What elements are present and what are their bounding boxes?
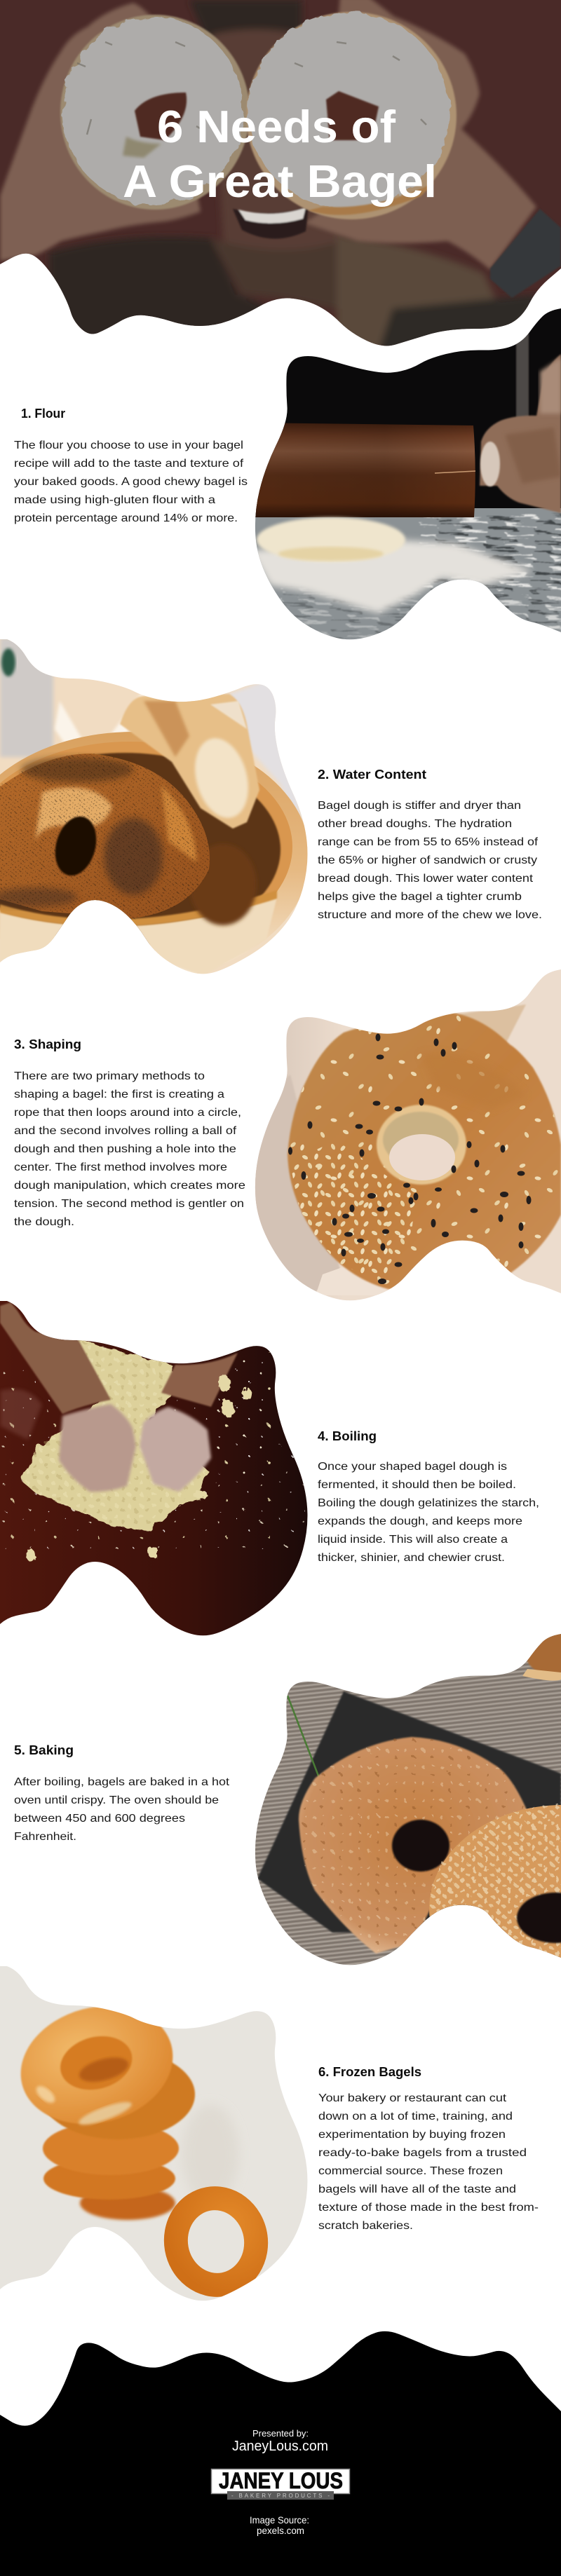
heading: 1. Flour: 1. Flour — [21, 407, 65, 421]
body text: shaping: rope that then loops around into a circle, — [14, 1107, 241, 1119]
heading: 6. Frozen Bagels: 6. Frozen Bagels — [318, 2065, 421, 2079]
image source: Image Source: — [250, 2514, 309, 2526]
body text: baking: between 450 and 600 degrees — [14, 1813, 185, 1825]
presented by: Presented by: — [252, 2428, 309, 2439]
left hand — [0, 3, 201, 261]
image source: pexels.com — [257, 2525, 304, 2536]
body text: flour: The flour you choose to use in your bagel — [14, 439, 243, 451]
body text: frozen bagels: down on a lot of time, training, and — [318, 2111, 513, 2122]
body text: water content — [318, 800, 542, 921]
loose dough crumbs — [27, 1375, 252, 1562]
panel: 3. Shaping — [14, 966, 561, 1309]
dough mass — [22, 1340, 208, 1531]
left arm and hand — [0, 1302, 136, 1492]
body text: baking: Fahrenheit. — [14, 1831, 76, 1843]
photo: toasted bagels on slate — [255, 1634, 561, 1965]
chive — [288, 1696, 319, 1778]
body text: baking — [14, 1776, 230, 1843]
body text: flour: recipe will add to the taste and texture of — [14, 458, 244, 470]
body text: boiling: Boiling the dough gelatinizes the starch, — [318, 1497, 539, 1509]
body text: water content: range can be from 55 to 65% instead of — [318, 836, 539, 848]
rolling pin — [249, 423, 475, 517]
body text: water content: bread dough. This lower water content — [318, 873, 534, 885]
body text: baking: oven until crispy. The oven should be — [14, 1794, 219, 1806]
body text: frozen bagels: bagels will have all of the taste and — [318, 2183, 516, 2195]
photo: rolling pin on dough — [249, 305, 561, 648]
body text: frozen bagels: texture of those made in the best from- — [318, 2202, 539, 2214]
body text: water content: helps give the bagel a tighter crumb — [318, 891, 522, 903]
footer — [0, 2331, 561, 2576]
body text: frozen bagels — [318, 2092, 539, 2232]
poppy seed bagel — [0, 754, 210, 918]
heading: 5. Baking: 5. Baking — [14, 1743, 74, 1757]
hero: woman holding bagels with title — [0, 0, 561, 350]
body text: flour: made using high-gluten flour with a — [14, 494, 215, 506]
body text: frozen bagels: experimentation by buying frozen — [318, 2129, 506, 2141]
bagel body — [280, 1013, 561, 1290]
body text: shaping: dough and then pushing a hole into the — [14, 1143, 236, 1155]
photo: sesame bagel — [249, 966, 561, 1309]
slate board — [257, 1691, 561, 1933]
dough — [257, 517, 405, 562]
footer black wave — [0, 2331, 561, 2576]
bagel stack — [8, 1989, 195, 2220]
body text: frozen bagels: ready-to-bake bagels from a trusted — [318, 2147, 527, 2159]
right arm and hand — [140, 1353, 238, 1492]
logo: Janey Lous bakery products: - BAKERY PRODUCTS - — [231, 2493, 330, 2499]
heading: 3. Shaping: 3. Shaping — [14, 1037, 81, 1051]
body text: shaping: and the second involves rolling a ball of — [14, 1125, 237, 1137]
presented by — [232, 2428, 328, 2454]
body text: shaping — [14, 1070, 245, 1228]
heading: 4. Boiling: 4. Boiling — [318, 1429, 377, 1443]
heading: 2. Water Content: 2. Water Content — [318, 768, 426, 782]
body text: frozen bagels: commercial source. These frozen — [318, 2165, 503, 2177]
presented by: JaneyLous.com — [232, 2439, 328, 2454]
photo: stack of orange bagels — [0, 1961, 312, 2305]
body text: shaping: dough manipulation, which creates more — [14, 1180, 245, 1192]
body text: frozen bagels: Your bakery or restaurant can cut — [318, 2092, 507, 2104]
panel: 1. Flour — [14, 305, 561, 648]
body text: boiling — [318, 1461, 539, 1564]
body text: flour: protein percentage around 14% or more. — [14, 512, 238, 524]
bread piece — [120, 694, 259, 829]
baker hand — [480, 354, 561, 513]
body text: baking: After boiling, bagels are baked in a hot — [14, 1776, 230, 1788]
watch — [490, 209, 561, 298]
body text: water content: structure and more of the chew we love. — [318, 909, 542, 921]
title: A Great Bagel — [123, 156, 437, 207]
panel: 5. Baking — [14, 1634, 561, 1965]
title — [123, 101, 437, 207]
body text: frozen bagels: scratch bakeries. — [318, 2220, 413, 2232]
panel: 2. Water Content — [0, 634, 542, 981]
panel: 4. Boiling — [0, 1296, 539, 1640]
hero photo — [0, 0, 561, 350]
left bagel — [60, 15, 250, 210]
image source — [250, 2514, 309, 2536]
body text: flour: your baked goods. A good chewy bagel is — [14, 476, 248, 488]
body text: water content: the 65% or higher of sandwich or crusty — [318, 854, 537, 866]
sesame bagel — [429, 1805, 561, 2012]
body text: shaping: tension. The second method is gentler on — [14, 1198, 244, 1210]
body text: water content: Bagel dough is stiffer and dryer than — [318, 800, 521, 812]
mouth — [233, 206, 309, 239]
logo: Janey Lous bakery products: JANEY LOUS — [219, 2468, 343, 2493]
right bagel — [246, 12, 457, 219]
black sesame seeds — [288, 1033, 532, 1284]
body text: shaping: shaping a bagel: the first is creating a — [14, 1089, 224, 1100]
body text: shaping: center. The first method involves more — [14, 1161, 227, 1173]
photo: poppy bagel in basket — [0, 634, 312, 981]
body text: boiling: thicker, shinier, and chewier crust. — [318, 1552, 505, 1564]
bagel hole — [377, 1105, 466, 1185]
body text: shaping: the dough. — [14, 1216, 74, 1228]
body text: boiling: Once your shaped bagel dough is — [318, 1461, 507, 1473]
toasted bagel — [299, 1737, 529, 1954]
body text: water content: other bread doughs. The hydration — [318, 818, 512, 830]
panel: 6. Frozen Bagels — [0, 1961, 539, 2305]
photo: hands kneading dough — [0, 1296, 312, 1640]
body text: boiling: expands the dough, and keeps more — [318, 1515, 522, 1527]
body text: boiling: liquid inside. This will also create a — [318, 1534, 508, 1546]
body text: boiling: fermented, it should then be boiled. — [318, 1479, 516, 1491]
body text: shaping: There are two primary methods to — [14, 1070, 205, 1082]
right hand — [304, 0, 536, 270]
loose bagel ring — [169, 2192, 263, 2291]
title: 6 Needs of — [157, 101, 396, 152]
body text: flour — [14, 439, 248, 524]
basket — [0, 732, 310, 981]
